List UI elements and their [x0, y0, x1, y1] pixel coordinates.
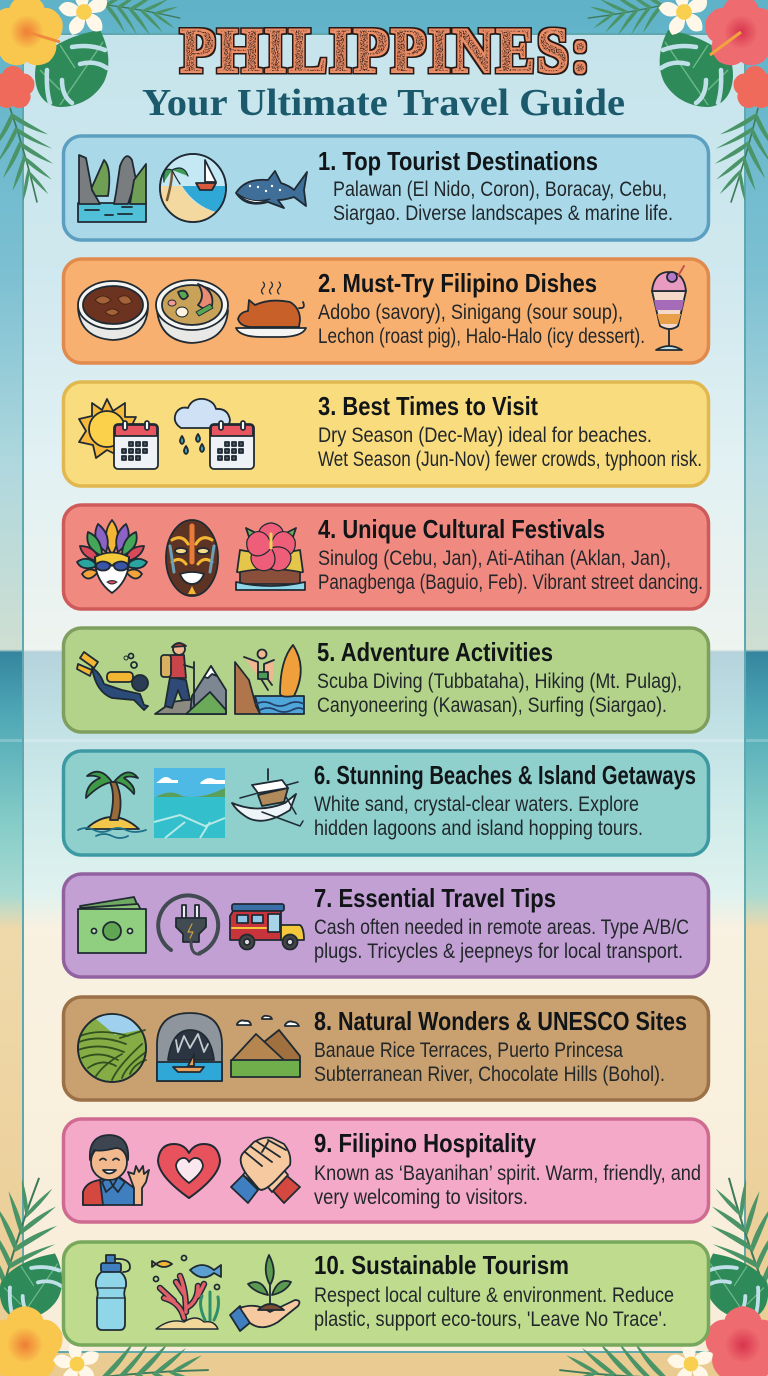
heading: 10. Sustainable Tourism: [314, 1250, 569, 1280]
panel 3: best times to visit: [64, 382, 708, 486]
icon: waving person: [83, 1135, 149, 1205]
icon: palm island: [78, 772, 146, 838]
icon: whale shark: [236, 171, 307, 208]
body text: [314, 916, 689, 963]
heading: 1. Top Tourist Destinations: [318, 146, 598, 176]
icon: rice terraces: [78, 1014, 146, 1082]
body text: Subterranean River, Chocolate Hills (Bohol).: [314, 1063, 665, 1086]
panel 8: natural wonders and UNESCO sites: [64, 997, 708, 1100]
body text: [318, 301, 645, 348]
icon: chocolate hills: [231, 1016, 300, 1077]
icon: coral reef and fish: [152, 1256, 221, 1329]
panel 5: adventure activities: [64, 628, 708, 732]
body text: Scuba Diving (Tubbataha), Hiking (Mt. Pulag),: [317, 670, 682, 693]
icon: beach and sailboat: [160, 154, 226, 222]
icon: bangka outrigger boat: [232, 769, 303, 826]
body text: Cash often needed in remote areas. Type A/B/C: [314, 916, 689, 939]
icon: sinigang bowl: [156, 280, 228, 343]
icon: jeepney: [230, 904, 304, 950]
icon: halo-halo dessert: [652, 266, 686, 350]
icon: feathered festival mask: [77, 520, 147, 593]
panel 4: unique cultural festivals: [64, 505, 708, 609]
panel 10: sustainable tourism: [64, 1242, 708, 1345]
body text: Banaue Rice Terraces, Puerto Princesa: [314, 1039, 623, 1062]
subtitle: Your Ultimate Travel Guide: [142, 82, 625, 124]
body text: Siargao. Diverse landscapes & marine life.: [333, 202, 673, 225]
heading: 9. Filipino Hospitality: [314, 1128, 536, 1158]
body text: [314, 1284, 674, 1331]
icon: limestone cliffs: [78, 155, 146, 222]
body text: very welcoming to visitors.: [314, 1186, 528, 1209]
heading: 4. Unique Cultural Festivals: [318, 514, 605, 544]
body text: [318, 424, 702, 471]
body text: Sinulog (Cebu, Jan), Ati-Atihan (Aklan, Jan),: [318, 547, 671, 570]
decoration: bottom left foliage and flowers: [0, 1167, 211, 1376]
icon: rain cloud with calendar: [175, 399, 254, 469]
decoration: top left foliage and flowers: [0, 0, 185, 211]
icon: underground river cave: [157, 1013, 222, 1081]
heading: 3. Best Times to Visit: [318, 391, 538, 421]
body text: hidden lagoons and island hopping tours.: [314, 817, 643, 840]
panel 7: essential travel tips: [64, 874, 708, 977]
body text: White sand, crystal-clear waters. Explore: [314, 793, 639, 816]
body text: [314, 793, 643, 840]
panel 9: Filipino hospitality: [64, 1119, 708, 1222]
icon: power plug: [158, 895, 218, 954]
decoration: bottom right foliage and flowers: [557, 1167, 768, 1376]
body text: Respect local culture & environment. Reduce: [314, 1284, 674, 1307]
body text: Known as ‘Bayanihan’ spirit. Warm, friendly, and: [314, 1162, 701, 1185]
panel 6: stunning beaches and island getaways: [64, 751, 708, 855]
icon: cliff jumper and surfboard: [235, 645, 304, 714]
icon: lagoon photo: [154, 768, 225, 838]
body text: Adobo (savory), Sinigang (sour soup),: [318, 301, 623, 324]
heading: 2. Must-Try Filipino Dishes: [318, 268, 597, 298]
icon: heart: [158, 1144, 220, 1198]
body text: [314, 1162, 701, 1209]
icon: scuba diver: [77, 652, 148, 710]
title: PHILIPPINES:: [180, 15, 590, 87]
icon: clasped hands: [231, 1138, 300, 1203]
icon: hand holding seedling: [230, 1255, 299, 1331]
icon: adobo bowl: [78, 281, 148, 340]
panel 2: must-try Filipino dishes: [64, 259, 708, 363]
body text: plugs. Tricycles & jeepneys for local transport.: [314, 940, 683, 963]
body text: [333, 178, 673, 225]
body text: Lechon (roast pig), Halo-Halo (icy dessert).: [318, 325, 645, 348]
body text: Canyoneering (Kawasan), Surfing (Siargao).: [317, 694, 667, 717]
heading: 7. Essential Travel Tips: [314, 883, 556, 913]
icon: cash: [78, 897, 146, 953]
icon: tribal mask: [166, 520, 218, 596]
body text: [317, 670, 682, 717]
body text: [314, 1039, 665, 1086]
body text: plastic, support eco-tours, 'Leave No Trace'.: [314, 1308, 667, 1331]
panel 1: top tourist destinations: [64, 136, 708, 240]
body text: Dry Season (Dec-May) ideal for beaches.: [318, 424, 652, 447]
body text: [318, 547, 703, 594]
body text: Palawan (El Nido, Coron), Boracay, Cebu,: [333, 178, 667, 201]
heading: 5. Adventure Activities: [317, 637, 553, 667]
heading: 8. Natural Wonders & UNESCO Sites: [314, 1006, 687, 1036]
icon: lechon roast pig: [236, 282, 306, 337]
decoration: top right foliage and flowers: [583, 0, 768, 211]
icon: flower float: [236, 523, 305, 590]
icon: reusable water bottle: [96, 1255, 130, 1330]
icon: hiker and mountain: [155, 643, 226, 714]
icon: sun with calendar: [79, 399, 158, 469]
